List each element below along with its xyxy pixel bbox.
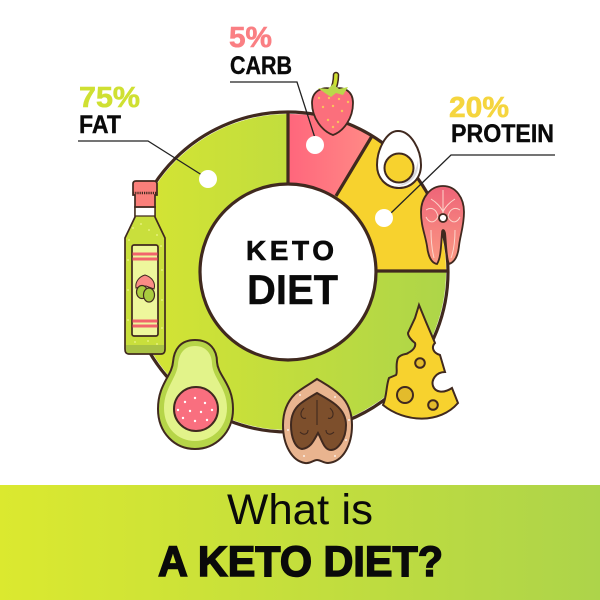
label: protein 20% <box>375 92 555 227</box>
center title <box>246 235 338 313</box>
segment: fat 75% <box>130 114 446 430</box>
icon: avocado <box>158 340 233 449</box>
icon: salmon steak <box>421 186 464 264</box>
icon: cheese wedge <box>383 305 458 419</box>
banner <box>0 485 600 600</box>
label: fat 75% <box>78 82 217 188</box>
center title: KETO <box>246 235 334 266</box>
label: carb 5%: 5% <box>229 22 272 54</box>
label: fat 75%: 75% <box>79 82 140 114</box>
donut chart <box>128 112 448 432</box>
icon: boiled egg <box>377 131 421 188</box>
banner heading <box>158 486 443 586</box>
banner heading: A KETO DIET? <box>158 538 443 586</box>
icon: olive oil bottle <box>125 181 165 354</box>
ring outlines <box>128 112 448 432</box>
label: protein 20%: 20% <box>449 92 509 124</box>
segment: protein 20% <box>335 137 446 271</box>
icon: strawberry <box>312 75 353 135</box>
label: fat 75%: FAT <box>79 111 121 139</box>
banner heading: What is <box>227 486 373 534</box>
segment: carb 5% <box>288 114 372 197</box>
label: protein 20%: PROTEIN <box>451 120 554 148</box>
center title: DIET <box>247 266 338 313</box>
label: carb 5%: CARB <box>230 52 292 80</box>
label: carb 5% <box>229 22 324 154</box>
icon: walnut <box>283 379 352 463</box>
